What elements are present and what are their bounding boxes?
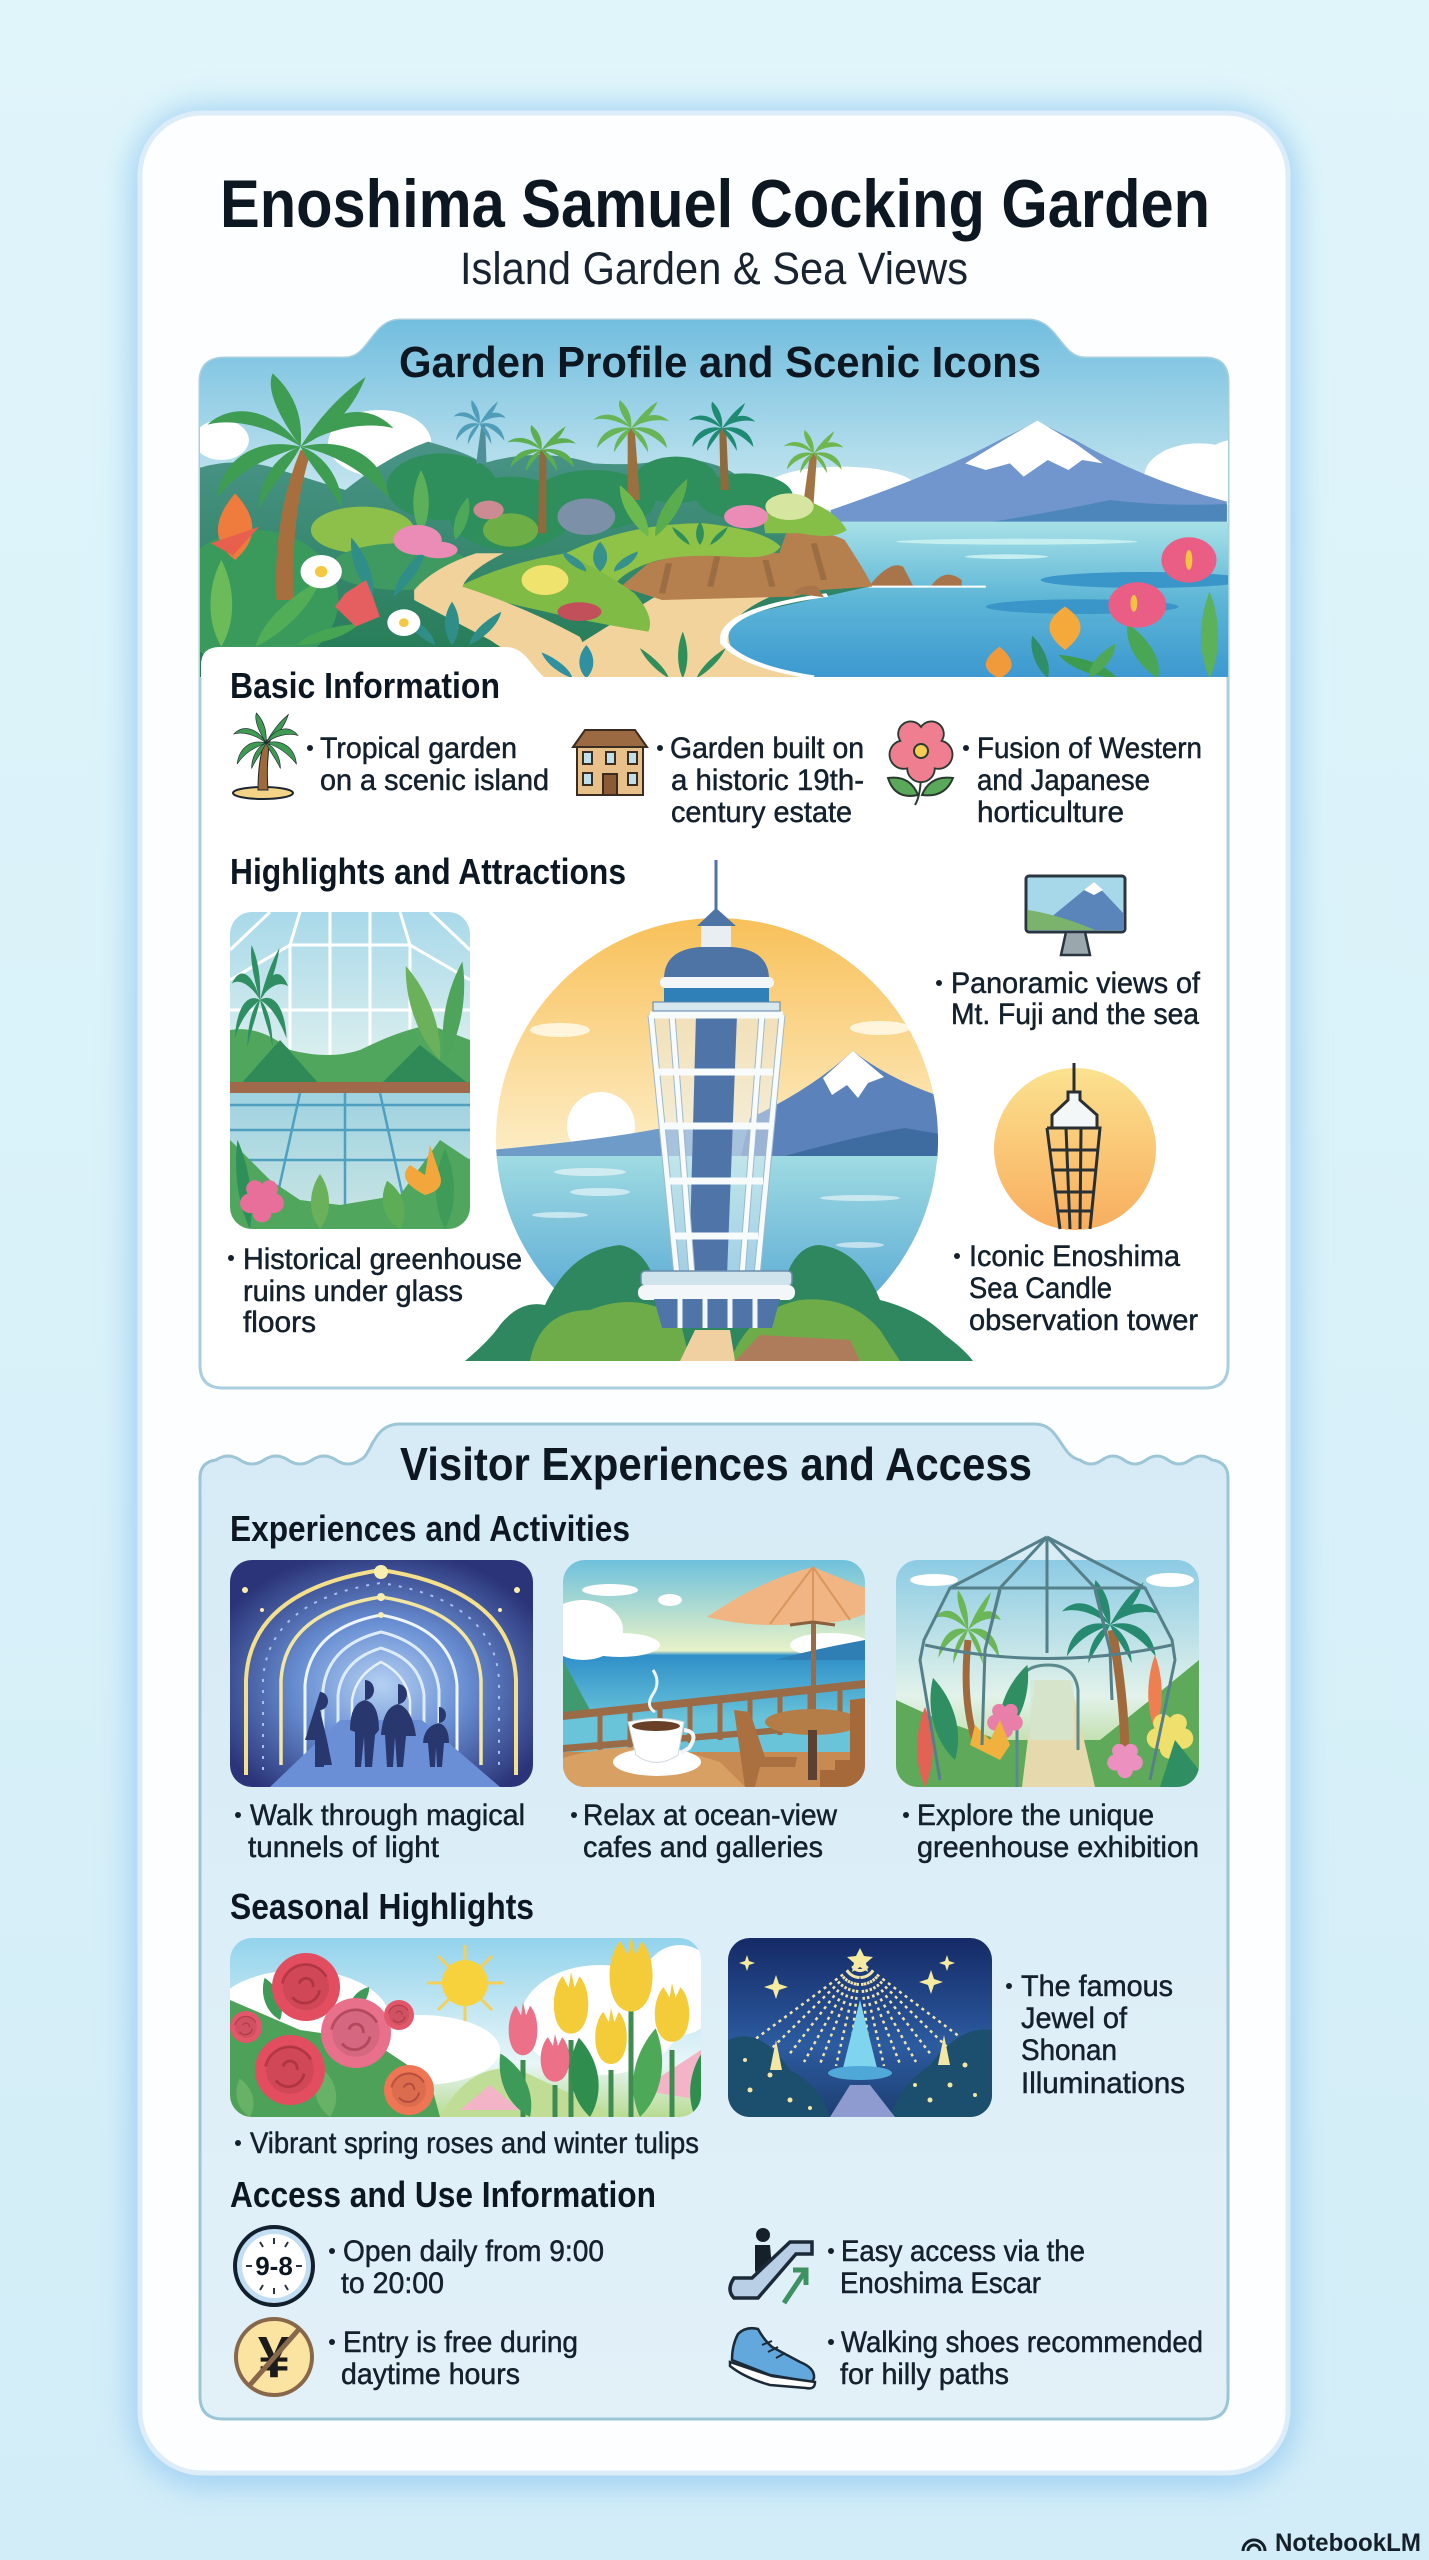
text: greenhouse exhibition — [903, 1799, 1199, 1864]
subtitle: Island Garden & Sea Views — [460, 243, 968, 294]
text: tropical garden — [307, 732, 549, 797]
icon: sea candle — [994, 1063, 1156, 1230]
icon: clock — [235, 2227, 313, 2305]
icon: flower — [888, 721, 953, 805]
text: hours — [329, 2235, 604, 2300]
image: greenhouse exhibition — [896, 1537, 1199, 1787]
card glow — [132, 108, 1296, 2486]
image: ocean cafe — [543, 1560, 870, 1787]
heading: experiences: Experiences and Activities — [230, 1508, 630, 1549]
text: greenhouse exhibition: greenhouse exhibition — [917, 1831, 1199, 1864]
text: jewel of shonan: Illuminations — [1021, 2067, 1185, 2100]
text: jewel of shonan: Jewel of — [1021, 2002, 1128, 2035]
heading: access: Access and Use Information — [230, 2174, 656, 2215]
text: walking shoes: for hilly paths — [840, 2358, 1009, 2391]
text: roses and tulips: Vibrant spring roses and winter tulips — [250, 2127, 699, 2160]
text: walking shoes — [828, 2326, 1203, 2391]
text: free entry: Entry is free during — [343, 2326, 578, 2359]
text: jewel of shonan — [1006, 1970, 1185, 2100]
text: tunnels of light — [235, 1799, 525, 1864]
heading: garden profile: Garden Profile and Scenic Icons — [399, 338, 1041, 387]
text: tunnels of light: tunnels of light — [248, 1831, 440, 1864]
image: jewel of shonan — [728, 1938, 992, 2117]
icon: escalator — [730, 2228, 812, 2303]
text: jewel of shonan: Shonan — [1021, 2034, 1117, 2067]
image: roses and tulips — [230, 1938, 701, 2117]
text: ocean cafes — [571, 1799, 837, 1864]
text: greenhouse ruins: floors — [243, 1306, 316, 1339]
palms — [276, 450, 311, 600]
text: garden built — [657, 732, 864, 829]
heading: basic information: Basic Information — [230, 665, 500, 706]
notebooklm logo: NotebookLM — [1275, 2529, 1421, 2557]
text: fusion: and Japanese — [977, 764, 1150, 797]
text: tunnels of light: Walk through magical — [250, 1799, 525, 1832]
text: greenhouse ruins — [228, 1243, 522, 1339]
text: escalator — [828, 2235, 1085, 2300]
hills — [465, 1245, 973, 1361]
text: fusion — [963, 732, 1202, 829]
text: jewel of shonan: The famous — [1021, 1970, 1173, 2003]
text: escalator: Easy access via the — [841, 2235, 1085, 2268]
text: escalator: Enoshima Escar — [840, 2267, 1041, 2300]
heading: visitor experiences: Visitor Experiences and Access — [400, 1438, 1032, 1490]
text: sea candle: Sea Candle — [969, 1272, 1112, 1305]
text: ocean cafes: cafes and galleries — [583, 1831, 823, 1864]
panel: visitor experiences — [200, 1424, 1228, 2419]
text: greenhouse ruins: Historical greenhouse — [243, 1243, 522, 1276]
text: sea candle: Iconic Enoshima — [969, 1240, 1180, 1273]
text: garden built: century estate — [671, 796, 852, 829]
illustration: greenhouse ruins — [230, 912, 471, 1232]
text: free entry — [329, 2326, 578, 2391]
text: walking shoes: Walking shoes recommended — [841, 2326, 1203, 2359]
icon: free entry — [236, 2319, 312, 2395]
text: hours: to 20:00 — [341, 2267, 444, 2300]
text: tropical garden: on a scenic island — [320, 764, 549, 797]
text: fusion: horticulture — [977, 796, 1124, 829]
title: Enoshima Samuel Cocking Garden — [220, 166, 1210, 242]
text: panoramic views: Mt. Fuji and the sea — [951, 998, 1199, 1031]
text: sea candle — [954, 1240, 1198, 1337]
panel: garden profile — [173, 317, 1263, 1388]
icon: panoramic monitor — [1026, 876, 1125, 955]
text: garden built: a historic 19th- — [671, 764, 864, 797]
text: sea candle: observation tower — [969, 1304, 1198, 1337]
icon: walking shoe — [730, 2328, 815, 2388]
icon: free entry: ¥ — [258, 2325, 290, 2390]
white tab behind basic information — [201, 647, 545, 678]
text: panoramic views — [936, 967, 1201, 1031]
heading: seasonal: Seasonal Highlights — [230, 1886, 534, 1927]
text: greenhouse exhibition: Explore the unique — [917, 1799, 1154, 1832]
image: tunnel of light — [230, 1560, 533, 1787]
text: fusion: Fusion of Western — [977, 732, 1202, 765]
heading: highlights: Highlights and Attractions — [230, 851, 626, 892]
text: tropical garden: Tropical garden — [320, 732, 517, 765]
text: ocean cafes: Relax at ocean-view — [583, 1799, 837, 1832]
text: greenhouse ruins: ruins under glass — [243, 1275, 463, 1308]
illustration: tropical coast scene — [173, 317, 1263, 682]
foliage — [210, 470, 1218, 682]
main white card — [140, 113, 1288, 2473]
illustration: sea candle tower — [465, 860, 973, 1366]
text: panoramic views: Panoramic views of — [951, 967, 1201, 1000]
icon: historic house — [573, 730, 647, 795]
text: free entry: daytime hours — [341, 2358, 520, 2391]
text: hours: Open daily from 9:00 — [343, 2235, 604, 2268]
icon: clock: 9-8 — [255, 2251, 293, 2281]
text: garden built: Garden built on — [670, 732, 864, 765]
flowers — [218, 493, 252, 560]
icon: palm island — [233, 713, 298, 799]
tower — [714, 860, 718, 910]
